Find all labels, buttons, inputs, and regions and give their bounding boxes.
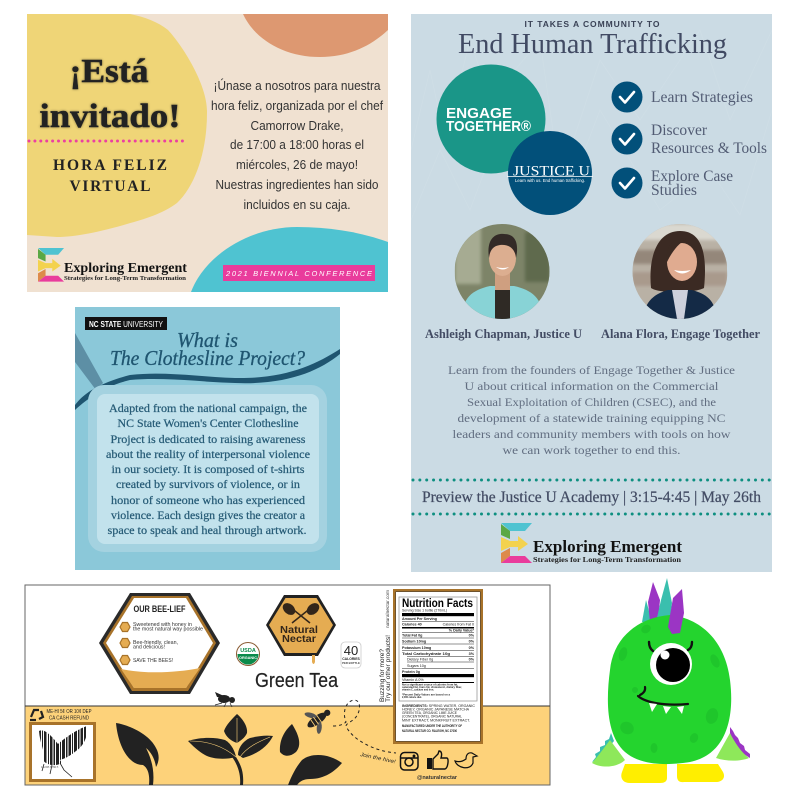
calorie badge: PER BOTTLE [342, 661, 360, 665]
conference banner [223, 265, 375, 281]
bullet text: Sweetened with honey in [133, 622, 192, 628]
monster eyelashes [649, 642, 692, 651]
icon: crossed honey dippers [281, 601, 321, 623]
hexagon: Our Bee-Lief: OUR BEE-LIEF [134, 604, 186, 614]
NC State badge: NC STATE UNIVERSITY [89, 320, 164, 329]
checklist labels: Discover [651, 122, 708, 139]
bullet text: the most natural way possible [133, 626, 203, 632]
monster right arm [716, 727, 750, 761]
card paragraph: NC State Women's Center Clothesline [118, 416, 298, 430]
conference banner: 2021 BIENNIAL CONFERENCE [225, 269, 373, 278]
description paragraph: Learn from the founders of Engage Together & Justice [448, 363, 735, 377]
card paragraph [106, 401, 310, 537]
icon: recycle [30, 710, 43, 720]
monster spikes [642, 578, 672, 630]
card paragraph: created by survivors of violence, or in [116, 477, 300, 491]
nutrition facts panel: Protein 0g [402, 670, 420, 674]
panel: Está invitado invitation [27, 14, 388, 292]
nutrition facts panel: Total Carbohydrate 10g [402, 652, 450, 656]
ingredients: NATURAL NECTAR CO. RALEIGH, NC 27606 [402, 728, 458, 733]
invitation text: hora feliz, organizada por el chef [211, 98, 383, 113]
monster purple spike [668, 589, 684, 634]
heading: Está invitado [39, 56, 179, 130]
nutrition facts panel: 0% [469, 640, 475, 644]
description paragraph: we can work together to end this. [502, 443, 680, 457]
icon: bird [455, 753, 477, 768]
leaf illustration 2 [188, 714, 273, 785]
speaker names: Alana Flora, Engage Together [601, 326, 760, 341]
card paragraph: honor of someone who has experienced [111, 493, 305, 507]
calorie badge [341, 642, 361, 668]
heading: What is The Clothesline Project: The Clothesline Project? [110, 346, 305, 370]
vertical text: Buzzing for more: Buzzing for more? [379, 649, 386, 702]
heading: Está invitado: invitado! [40, 98, 180, 135]
deposit text [46, 709, 92, 722]
deposit text: CA CASH REFUND [49, 716, 89, 722]
nutrition facts panel: Total Fat 0g [402, 634, 422, 638]
bullet text [133, 622, 203, 664]
teal circle [191, 227, 388, 292]
monster feet [621, 764, 724, 783]
dashed flight path [333, 700, 396, 753]
ingredients: GREEN TEA, ORGANIC LIME JUICE [402, 710, 457, 715]
logo circle: Justice U: Learn with us. End human trafficking. [515, 178, 585, 183]
social handle: @naturalnectar [417, 775, 458, 781]
monster spots [617, 623, 722, 753]
nutrition facts panel: Sugars 10g [407, 664, 426, 668]
leaf illustration 3 [280, 724, 342, 785]
bullet text: and delicious! [133, 644, 165, 650]
monster teeth [649, 703, 684, 714]
calorie badge: 40 [344, 643, 358, 658]
nutrition facts panel: Serving Size 1 bottle (270mL) [402, 608, 447, 612]
hexagon: Our Bee-Lief [99, 593, 220, 694]
nutrition facts panel: 3% [469, 652, 475, 656]
nutrition facts panel: Sodium 10mg [402, 640, 426, 644]
invitation text [211, 78, 383, 212]
clothesline wave [75, 349, 340, 410]
logo: Exploring Emergent [501, 523, 683, 564]
card paragraph: about the reality of interpersonal violence [106, 447, 310, 461]
NC State badge [85, 317, 167, 330]
nutrition facts panel: 0% [469, 658, 475, 662]
badge: USDA organic: USDA [240, 648, 256, 654]
orange circle [243, 14, 388, 57]
nutrition facts panel: Nutrition Facts [402, 598, 473, 610]
panel: Natural Nectar green tea label [25, 585, 550, 785]
nutrition facts panel: Potassium 10mg [402, 646, 431, 650]
checklist labels: Explore Case [651, 168, 733, 185]
nutrition facts panel: Calories 40 [402, 623, 422, 627]
logo circle: Engage Together: TOGETHER® [446, 118, 531, 135]
nutrition facts panel [393, 589, 483, 744]
checklist labels: Learn Strategies [651, 89, 753, 106]
check icon 3 [612, 168, 642, 198]
nutrition facts panel: Dietary Fiber 0g [407, 658, 433, 662]
description paragraph [448, 363, 735, 457]
leaf illustration 1 [116, 723, 159, 785]
badge: USDA organic [236, 642, 260, 666]
text: Join the hive: Join the hive! [358, 752, 397, 766]
monster body [608, 615, 731, 764]
monster smile [638, 687, 688, 705]
text card [88, 385, 327, 552]
logo: Natural Nectar hexagon: Nectar [282, 634, 316, 645]
invitation text: de 17:00 a 18:00 horas el [230, 137, 364, 152]
description paragraph: Sexual Exploitation of Children (CSEC), and the [467, 395, 716, 409]
portrait: Alana Flora [632, 224, 727, 319]
logo circle: Engage Together [436, 64, 546, 174]
nutrition facts panel: *Percent Daily Values are based on a [402, 692, 451, 696]
logo circle: Justice U: JUSTICE U [513, 164, 590, 180]
teal dotted line lower [413, 512, 772, 516]
card paragraph: Adapted from the national campaign, the [109, 401, 307, 415]
speaker names: Ashleigh Chapman, Justice U [425, 326, 583, 341]
barcode box with bee: 0 12345 67890 5 [41, 767, 59, 769]
icon: thumbs up [427, 751, 448, 769]
ingredients [402, 703, 475, 733]
icon: fly silhouette on divider [215, 692, 235, 707]
logo: Exploring Emergent [38, 248, 188, 282]
ingredients: HONEY, ORGANIC JAPANESE MATCHA [402, 706, 469, 712]
yellow blob [27, 14, 207, 237]
ingredients: MINT EXTRACT, MONKFRUIT EXTRACT. [402, 718, 470, 722]
card paragraph: Project is dedicated to raising awareness [110, 432, 306, 446]
logo: Exploring Emergent: Exploring Emergent [64, 260, 188, 275]
bullet text: Bee-friendly, clean, [133, 640, 178, 646]
heading: What is The Clothesline Project [111, 332, 305, 370]
logo: Exploring Emergent: Exploring Emergent [533, 537, 683, 556]
nutrition facts panel: 2,000 calorie diet. [402, 695, 422, 699]
subheading: Hora feliz virtual [53, 160, 166, 191]
nutrition facts panel: % Daily Value* [449, 629, 475, 633]
nutrition facts panel: Calories from Fat 0 [443, 623, 474, 627]
calorie badge: CALORIES [342, 657, 360, 661]
bullet text: SAVE THE BEES! [133, 658, 173, 664]
invitation text: miércoles, 26 de mayo! [236, 157, 358, 172]
illustration: green monster [592, 578, 750, 783]
description paragraph: development of a statewide training equipping NC [458, 411, 726, 425]
speaker names [425, 329, 760, 340]
badge: USDA organic: ORGANIC [239, 656, 257, 660]
nutrition facts panel: Amount Per Serving [402, 617, 437, 621]
icon: bee [300, 700, 338, 738]
nutrition facts panel: 0% [469, 634, 475, 638]
ingredients: (CONCENTRATE), ORGANIC NATURAL [402, 714, 463, 718]
checklist labels [651, 89, 767, 199]
logo circle: Engage Together: ENGAGE [446, 105, 512, 122]
deposit text: ME-HI 5¢ OR 10¢ DEP [46, 709, 92, 715]
heading: End Human Trafficking: IT TAKES A COMMUNITY TO [524, 19, 660, 29]
logo: Exploring Emergent: Strategies for Long-Term Transformation [533, 555, 682, 564]
barcode box with bee [29, 722, 96, 782]
subheading: Hora feliz virtual: VIRTUAL [70, 178, 150, 195]
logo: Exploring Emergent: Strategies for Long-Term Transformation [64, 275, 186, 282]
portrait: Ashleigh Chapman [455, 224, 550, 319]
check icon 1 [612, 82, 642, 112]
clothespin [75, 333, 103, 390]
invitation text: incluidos en su caja. [244, 197, 350, 212]
schedule line: Preview the Justice U Academy | 3:15-4:45 | May 26th [422, 489, 761, 506]
vertical text: Buzzing for more: Try our other products! [385, 635, 392, 702]
heading: Está invitado: ¡Está [70, 53, 148, 90]
product name: Green Tea: Green Tea [255, 670, 339, 692]
description paragraph: U about critical information on the Commercial [464, 379, 719, 393]
checklist labels: Studies [651, 182, 697, 199]
subheading: Hora feliz virtual: HORA FELIZ [53, 157, 167, 174]
nutrition facts panel: saturated fat, trans fat, cholesterol, dietary fiber, [402, 685, 462, 689]
check icon 2 [612, 124, 642, 154]
logo: Natural Nectar hexagon: Natural [280, 625, 318, 636]
teal dotted line upper [413, 478, 772, 482]
bullet hexagons [120, 622, 130, 664]
invitation text: Camorrow Drake, [250, 118, 344, 133]
card paragraph: violence. Each design gives the creator a [111, 508, 306, 522]
nutrition facts panel: vitamin C, calcium and iron. [402, 688, 434, 692]
invitation text: Nuestras ingredientes han sido [216, 177, 378, 192]
invitation text: ¡Únase a nosotros para nuestra [214, 78, 381, 93]
nutrition facts panel: Not a significant source of calories from fat, [402, 682, 458, 686]
pink dotted divider [29, 140, 188, 142]
panel: End Human Trafficking [411, 14, 772, 572]
heading: What is The Clothesline Project: What is [177, 328, 238, 352]
ingredients: INGREDIENTS: SPRING WATER, ORGANIC [402, 703, 475, 708]
checklist labels: Resources & Tools [651, 140, 767, 157]
heading: End Human Trafficking: End Human Trafficking [458, 28, 727, 60]
panel: The Clothesline Project [75, 307, 340, 570]
monster left arm [592, 733, 625, 767]
ingredients: MANUFACTURED UNDER THE AUTHORITY OF [402, 723, 462, 728]
nutrition facts panel: Vitamin A 0% [402, 678, 424, 682]
monster eye [650, 643, 692, 685]
card paragraph: space to speak and heal through artwork. [108, 523, 306, 537]
vertical text: Buzzing for more [379, 635, 392, 702]
icon: instagram [400, 752, 418, 770]
card paragraph: in our society. It is composed of t-shirts [112, 462, 305, 476]
logo circle: Justice U [507, 131, 593, 215]
logo: Natural Nectar hexagon [266, 595, 336, 664]
nutrition facts panel: 0% [469, 646, 475, 650]
checklist [612, 82, 767, 199]
description paragraph: leaders and community members with tools on how [452, 427, 731, 441]
website vertical text: naturalnectar.com [385, 590, 390, 628]
